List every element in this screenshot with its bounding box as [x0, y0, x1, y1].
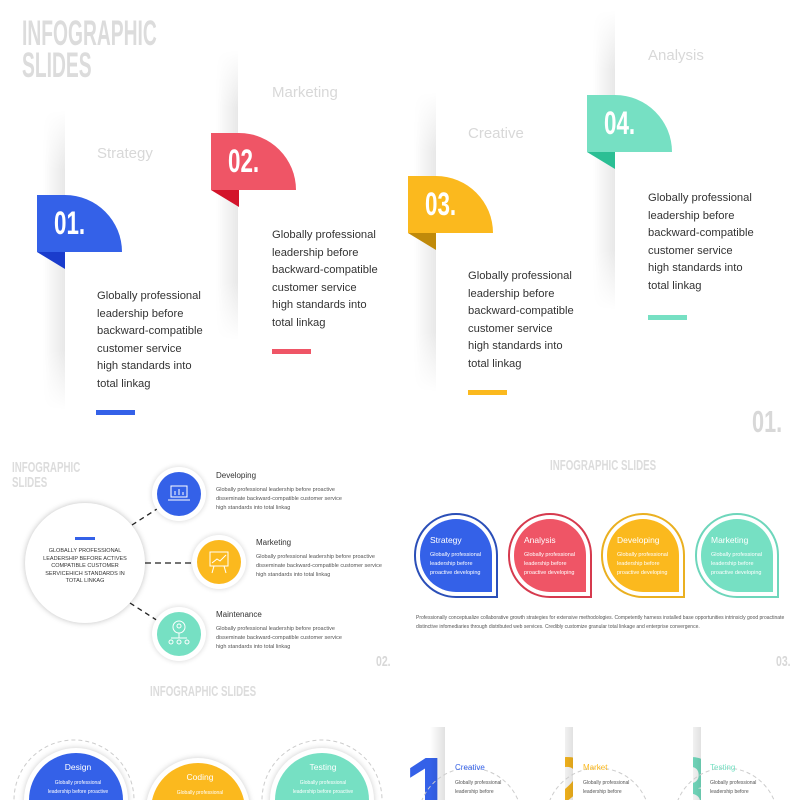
text 2: customer service: [272, 282, 357, 294]
drop: strategy: [414, 513, 498, 598]
drop: analysis: Analysis: [524, 535, 556, 545]
drop: marketing: Globally professional: [711, 552, 762, 558]
text 3: Globally professional: [468, 270, 572, 282]
numbered cards bottom right: leadership before: [583, 789, 622, 795]
drop: marketing: [695, 513, 779, 598]
circles: design coding testing: leadership before proactive: [48, 789, 108, 795]
text: maintenance: disseminate backward-compatible customer service: [216, 635, 342, 641]
text 2: backward-compatible: [272, 264, 378, 276]
shadow 3: [422, 114, 436, 370]
tab 03: [408, 176, 493, 233]
icon: maintenance network: [157, 612, 201, 656]
drop: analysis: Globally professional: [524, 552, 575, 558]
text: marketing: Marketing: [256, 538, 291, 547]
fold 03: [408, 233, 436, 250]
drop: developing: Developing: [617, 535, 660, 545]
bar 4: [648, 315, 687, 320]
text: marketing: Globally professional leadership before proactive: [256, 554, 375, 560]
text 3: backward-compatible: [468, 305, 574, 317]
text 4: total linkag: [648, 280, 702, 292]
text 1: leadership before: [97, 308, 183, 320]
page number 02: 02.: [376, 653, 391, 670]
numbered cards bottom right: Creative: [455, 763, 485, 772]
text: maintenance: [216, 610, 342, 650]
drop: developing: leadership before: [617, 561, 660, 567]
icon: developing laptop: [157, 472, 201, 516]
fold 01: [37, 252, 65, 269]
title: [22, 14, 157, 85]
bar 1: [96, 410, 135, 415]
circles: design coding testing: Testing: [310, 762, 337, 772]
text 1: customer service: [97, 342, 182, 354]
drop: marketing: leadership before: [711, 561, 754, 567]
big hub circle: COMPATIBLE CUSTOMER: [51, 563, 119, 569]
bar 3: [468, 390, 507, 395]
drop: strategy: proactive developing: [430, 570, 480, 576]
text: maintenance: high standards into total linkag: [216, 644, 290, 650]
label: analysis: Analysis: [648, 47, 704, 64]
text 2: leadership before: [272, 246, 358, 258]
text 4: leadership before: [648, 210, 734, 222]
text 1: [97, 290, 203, 390]
tab 04: [587, 95, 672, 152]
drop: analysis: [508, 513, 592, 598]
numbered cards bottom right: [404, 727, 774, 800]
circles: design coding testing: Globally professional: [300, 780, 346, 786]
numbered cards bottom right: leadership before: [710, 789, 749, 795]
big hub circle: LEADERSHIP BEFORE ACTIVES: [43, 556, 127, 562]
bar 2: [272, 349, 311, 354]
diagram: hub connectors: [130, 508, 191, 620]
circles: design coding testing: Globally professional: [55, 780, 101, 786]
icon: marketing chart board: [197, 540, 241, 584]
big hub circle: TOTAL LINKAG: [66, 578, 104, 584]
numbered cards bottom right: Globally professional: [583, 780, 629, 786]
text: marketing: high standards into total linkag: [256, 572, 330, 578]
drop: analysis: proactive developing: [524, 570, 574, 576]
shadow 4: [601, 32, 615, 288]
text 4: customer service: [648, 244, 733, 256]
text: maintenance: Maintenance: [216, 610, 262, 619]
paragraph: Professionally conceptualize collaborative growth strategies for extensive methodologies. Competently harness installed base opportunities intrinsicly good proactinate distinctive infomediaries through distributed web services. Credibly customize granular total linkage and enterprise convergence.: [416, 615, 784, 630]
drop: strategy: leadership before: [430, 561, 473, 567]
tab 03: 03.: [425, 186, 456, 222]
page number 03: 03.: [776, 653, 791, 670]
drop: developing: Globally professional: [617, 552, 668, 558]
tab 02: [211, 133, 296, 190]
shadow 2: [224, 72, 238, 318]
text: developing: Globally professional leadership before proactive: [216, 487, 335, 493]
circles: design coding testing: Globally professional: [177, 790, 223, 796]
title: INFOGRAPHIC: [22, 14, 157, 53]
big hub circle: [25, 503, 145, 623]
circles: design coding testing: Design: [65, 762, 91, 772]
fold 04: [587, 152, 615, 169]
tab 01: [37, 195, 122, 252]
numbered cards bottom right: Testing: [710, 763, 735, 772]
page number 01: 01.: [752, 404, 782, 439]
text 2: Globally professional: [272, 229, 376, 241]
text 3: [468, 270, 574, 370]
text 4: [648, 192, 754, 292]
drop: analysis: leadership before: [524, 561, 567, 567]
numbered cards bottom right: Market: [583, 763, 608, 772]
text 4: backward-compatible: [648, 227, 754, 239]
text: marketing: disseminate backward-compatible customer service: [256, 563, 382, 569]
text: developing: Developing: [216, 471, 256, 480]
text 2: total linkag: [272, 316, 326, 328]
label: marketing: Marketing: [272, 84, 338, 101]
text 3: high standards into: [468, 340, 563, 352]
text 1: high standards into: [97, 360, 192, 372]
section 3 title: INFOGRAPHIC SLIDES: [550, 457, 656, 474]
title: SLIDES: [22, 46, 92, 85]
text: developing: high standards into total linkag: [216, 505, 290, 511]
circles: design coding testing: [14, 740, 382, 800]
section 2 title: INFOGRAPHIC: [12, 459, 80, 476]
text 4: Globally professional: [648, 192, 752, 204]
text 3: leadership before: [468, 288, 554, 300]
section 4 title: INFOGRAPHIC SLIDES: [150, 683, 256, 700]
tab 04: 04.: [604, 105, 635, 141]
label: creative: Creative: [468, 125, 524, 142]
text 4: high standards into: [648, 262, 743, 274]
section 2 title: [12, 459, 80, 491]
numbered cards bottom right: Globally professional: [455, 780, 501, 786]
tab 01: 01.: [54, 205, 85, 241]
text 3: customer service: [468, 322, 553, 334]
drop: strategy: Globally professional: [430, 552, 481, 558]
shadow 1: [51, 132, 65, 388]
big hub circle: GLOBALLY PROFESSIONAL: [49, 548, 121, 554]
text: developing: [216, 471, 342, 511]
tab 02: 02.: [228, 143, 259, 179]
numbered cards bottom right: leadership before: [455, 789, 494, 795]
numbered cards bottom right: Globally professional: [710, 780, 756, 786]
drop: marketing: Marketing: [711, 535, 748, 545]
text 1: Globally professional: [97, 290, 201, 302]
text 2: [272, 229, 378, 328]
fold 02: [211, 190, 239, 207]
drop: strategy: Strategy: [430, 535, 462, 545]
text 1: total linkag: [97, 378, 150, 390]
text: developing: disseminate backward-compatible customer service: [216, 496, 342, 502]
text: maintenance: Globally professional leadership before proactive: [216, 626, 335, 632]
big hub circle: SERVICEHICH STANDARDS IN: [45, 570, 125, 576]
text 3: total linkag: [468, 358, 522, 370]
circles: design coding testing: leadership before proactive: [293, 789, 353, 795]
section 2 title: SLIDES: [12, 474, 47, 491]
drop: developing: proactive developing: [617, 570, 667, 576]
text 2: high standards into: [272, 299, 367, 311]
drop: developing: [601, 513, 685, 598]
text 1: backward-compatible: [97, 325, 203, 337]
circles: design coding testing: Coding: [187, 772, 214, 782]
label: strategy: Strategy: [97, 145, 153, 162]
drop: marketing: proactive developing: [711, 570, 761, 576]
text: marketing: [256, 538, 382, 578]
